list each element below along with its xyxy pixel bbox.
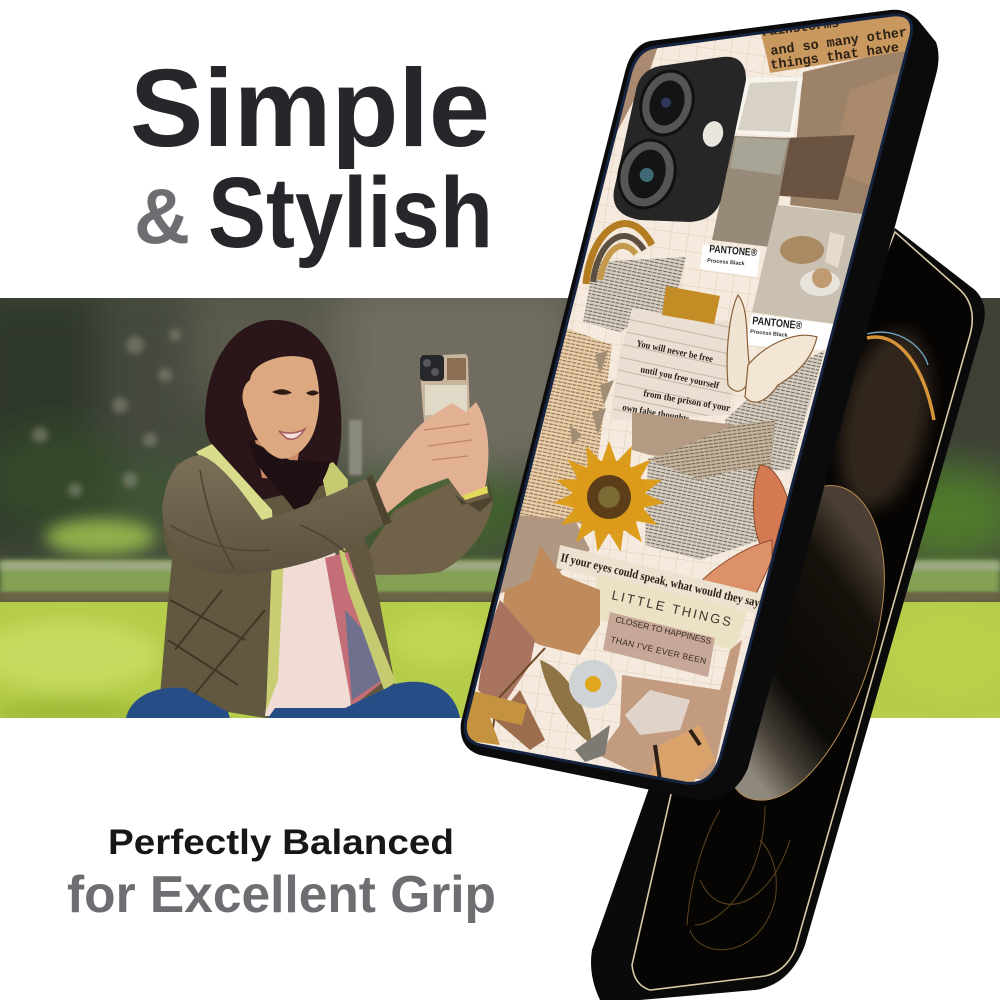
news clipping right [725,350,825,470]
mustard tape [662,286,720,324]
small phone in hand [420,354,470,422]
dome swirl [729,486,884,800]
small butterflies [570,350,614,445]
pantone card one: Process Black [707,258,746,267]
caption: for Excellent Grip: for Excellent Grip [67,866,496,924]
pantone card two: PANTONE® [752,315,803,332]
face [243,356,319,459]
front phone [450,0,938,801]
pantone card two: Process Black [750,329,789,339]
little things strip [590,575,747,650]
top tape with typewriter text: rainstorms [761,16,840,40]
wallpaper glow [687,323,945,950]
title: Simple: Simple [130,47,490,170]
camera module [608,57,746,222]
front sleeve [162,455,388,575]
brown paper left [495,515,590,595]
bright hedge [45,519,155,555]
flash [700,119,726,149]
beach photo [712,136,790,247]
rainbow sticker [586,224,652,284]
lamp post [349,420,362,475]
jacket base [160,462,396,718]
printed collage [466,16,910,782]
little things strip: LITTLE THINGS [610,587,733,629]
lens bottom [608,131,686,217]
quote text: until you free yourself [639,365,720,392]
neck [255,440,300,480]
tape strip bottom left [462,690,527,745]
quote text [621,339,732,425]
path strip [0,592,1000,602]
white framed photo [733,77,803,137]
back phone [591,228,985,1000]
cream butterfly [727,295,817,402]
bracelet [462,486,488,500]
eyes and mouth [272,389,319,396]
brown textured photo [790,51,906,214]
note paper [612,308,738,420]
title: ampersand: & [134,172,190,260]
collage base paper [474,34,867,782]
handwritten strip: THAN I'VE EVER BEEN [610,634,707,666]
quote text: from the prison of your [642,389,732,414]
quote text: own false thoughts. [621,403,692,425]
navy screen frame [465,15,912,783]
hair side [248,440,330,510]
case body [461,10,938,801]
handwritten strip [603,612,715,677]
back phone screen [632,232,972,990]
brown paper [632,412,735,465]
back phone body [591,228,985,1000]
title: Stylish: Stylish [208,157,493,269]
pantone card one: PANTONE® [709,243,758,259]
woman taking a selfie [126,320,493,718]
lawn foreground [0,602,1000,718]
quilting [168,590,265,700]
news clipping tan [516,328,612,550]
pressed leaves [478,545,600,750]
sunflower [552,441,666,554]
handwritten strip: CLOSER TO HAPPINESS [615,614,713,646]
swirl lines [687,806,790,950]
jeans [126,682,460,718]
caption: Perfectly Balanced: Perfectly Balanced [108,823,454,862]
top tape with typewriter text [761,16,910,73]
news clipping middle [645,432,778,560]
hands [372,402,488,515]
jacket lining [196,444,272,520]
photo band: park background [0,280,1000,724]
jacket back sleeve [368,482,493,575]
lens top [631,62,703,144]
news clipping upper [583,257,686,332]
daisy [569,660,617,708]
bokeh highlights [32,329,181,497]
left torn edge [616,48,658,133]
pantone card one [700,243,760,277]
top tape with typewriter text: and so many other [770,26,908,60]
rainbow arc [867,337,934,420]
hair back [205,320,341,520]
jacket cuff [366,474,493,526]
quote text: You will never be free [635,339,714,365]
pink butterfly [698,465,788,596]
bottom right collage [598,640,742,780]
small feather [575,725,610,762]
dry leaf [540,660,592,745]
table photo [752,205,870,325]
pantone card two [745,314,842,350]
sentence strip: If your eyes could speak, what would they say [559,550,762,610]
shirt [265,550,352,716]
plaid shirt [325,552,385,707]
lawn midground [0,560,1000,596]
top tape with typewriter text: things that have so [770,38,924,74]
